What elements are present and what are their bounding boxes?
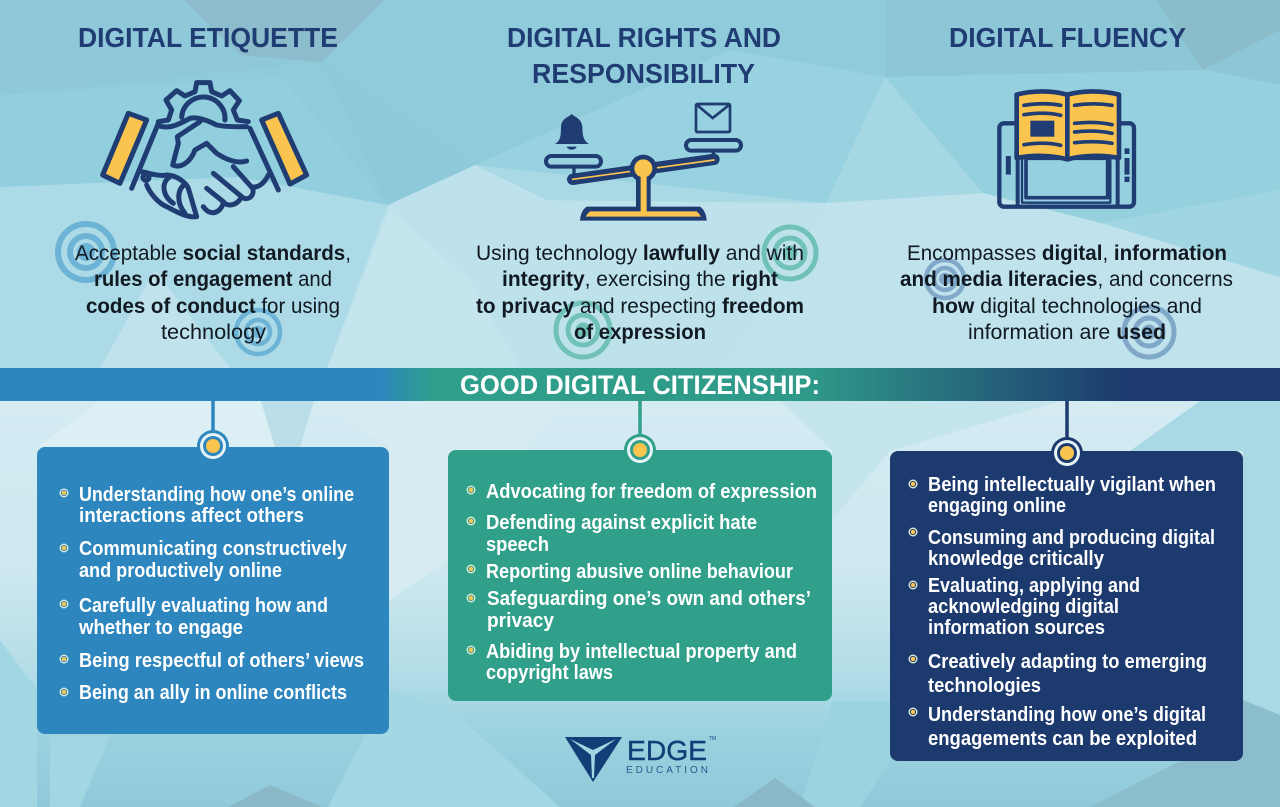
list text: navy: information sources: [928, 617, 1105, 639]
icon: handshake and gear: [103, 83, 307, 217]
list text: blue: [78, 484, 364, 704]
list text: navy: Evaluating, applying and: [928, 575, 1140, 597]
description: digital rights: [476, 242, 804, 344]
list text: green: Abiding by intellectual property and: [486, 641, 797, 663]
banner: good digital citizenship: GOOD DIGITAL CITIZENSHIP:: [460, 370, 820, 400]
list text: navy: Creatively adapting to emerging: [928, 651, 1207, 673]
heading: digital fluency: DIGITAL FLUENCY: [949, 22, 1186, 53]
list text: blue: Being an ally in online conflicts: [79, 682, 347, 704]
description: digital fluency: and media literacies, and concerns: [900, 268, 1233, 291]
banner: good digital citizenship: [0, 368, 1280, 401]
heading: digital rights and responsibility: [507, 22, 781, 89]
list text: green: copyright laws: [486, 662, 613, 684]
description: digital rights: Using technology lawfully and with: [476, 242, 804, 265]
list text: navy: engagements can be exploited: [928, 728, 1197, 750]
panel: green rights list: [448, 401, 832, 701]
description: digital etiquette: Acceptable social standards,: [75, 242, 351, 265]
connector: navy: [1051, 401, 1083, 469]
description: digital fluency: how digital technologies and: [932, 295, 1202, 318]
list text: navy: technologies: [928, 675, 1041, 697]
description: digital fluency: information are used: [968, 321, 1166, 344]
description: digital rights: of expression: [574, 321, 706, 344]
heading: digital etiquette: DIGITAL ETIQUETTE: [78, 22, 338, 53]
list text: navy: knowledge critically: [928, 548, 1105, 570]
list text: green: Defending against explicit hate: [486, 512, 757, 534]
description: digital etiquette: technology: [161, 321, 267, 344]
list text: navy: Consuming and producing digital: [928, 527, 1215, 549]
list text: green: Reporting abusive online behaviour: [486, 561, 793, 583]
list text: green: Advocating for freedom of expression: [486, 481, 817, 503]
ripple: left top: [58, 224, 114, 280]
list text: navy: Being intellectually vigilant when: [928, 474, 1216, 496]
description: digital fluency: Encompasses digital, information: [907, 242, 1227, 265]
connector: green: [624, 401, 656, 466]
list text: blue: and productively online: [79, 560, 282, 582]
connector: blue: [197, 401, 229, 462]
list text: blue: Understanding how one’s online: [79, 484, 354, 506]
description: digital etiquette: codes of conduct for using: [86, 295, 340, 318]
ripple: middle right: [764, 227, 816, 279]
list text: navy: engaging online: [928, 495, 1066, 517]
list text: blue: Communicating constructively: [79, 538, 348, 560]
list text: green: speech: [486, 534, 549, 556]
list text: green: privacy: [487, 610, 555, 632]
bullets: navy: [909, 480, 917, 716]
panel: navy fluency list: [890, 401, 1243, 761]
description: digital etiquette: [75, 242, 351, 344]
list text: navy: acknowledging digital: [928, 596, 1119, 618]
ripple: right top: [926, 260, 964, 298]
description: digital etiquette: rules of engagement and: [94, 268, 332, 291]
description: digital rights: to privacy and respecting freedom: [476, 295, 804, 318]
icon: balance scale with bell and envelope: [546, 104, 741, 221]
list text: blue: whether to engage: [78, 617, 243, 639]
list text: blue: Carefully evaluating how and: [79, 595, 328, 617]
list text: navy: [928, 474, 1216, 750]
list text: blue: Being respectful of others’ views: [79, 650, 364, 672]
logo: edge education: EDUCATION: [626, 765, 708, 776]
description: digital fluency: [900, 242, 1233, 344]
heading: digital rights and responsibility: RESPONSIBILITY: [532, 58, 755, 89]
list text: green: Safeguarding one’s own and others’: [487, 588, 811, 610]
logo: edge education: EDGE: [627, 735, 707, 766]
logo: edge education: [565, 735, 716, 782]
ripple: right bottom: [1124, 307, 1174, 357]
bullets: blue: [60, 489, 68, 696]
panel: blue etiquette list: [37, 401, 389, 734]
description: digital rights: integrity, exercising the right: [502, 268, 778, 291]
logo: edge education: TM: [709, 736, 716, 742]
bullets: green: [467, 486, 475, 654]
list text: blue: interactions affect others: [79, 505, 304, 527]
ripple: middle bottom: [556, 303, 610, 357]
list text: green: [486, 481, 817, 684]
list text: navy: Understanding how one’s digital: [928, 704, 1206, 726]
ripple: left bottom: [236, 310, 280, 354]
icon: book on tablet: [999, 91, 1134, 207]
heading: digital rights and responsibility: DIGITAL RIGHTS AND: [507, 22, 781, 53]
